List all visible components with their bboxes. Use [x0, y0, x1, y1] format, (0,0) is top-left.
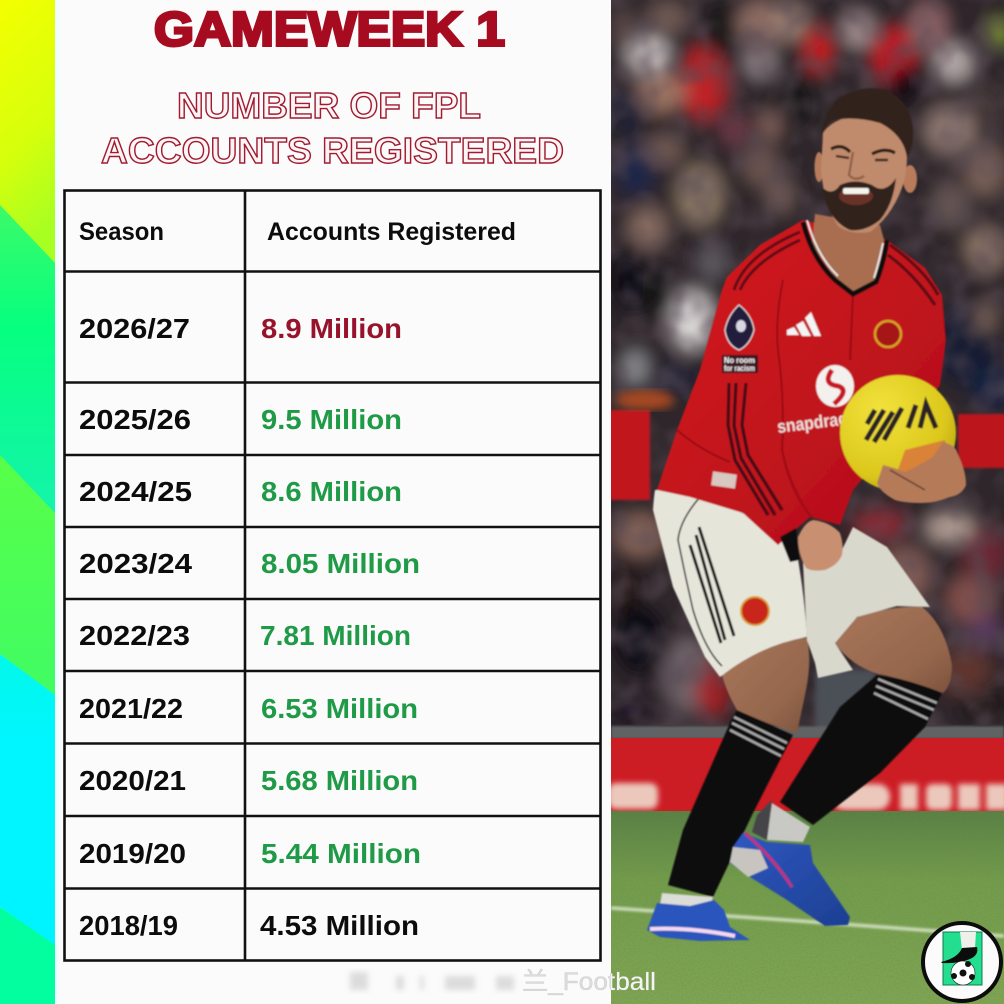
blurred board lettering: [608, 783, 1004, 810]
season column: 2026/27: [79, 313, 190, 344]
accounts column: [260, 313, 421, 941]
sleeve stripes: [728, 383, 782, 515]
season column: 2021/22: [79, 693, 183, 724]
table header: Accounts Registered: [267, 218, 516, 246]
subtitle: ACCOUNTS REGISTERED: [101, 130, 564, 171]
shorts piping and stripes: [678, 497, 734, 666]
front sock stripes: [730, 717, 787, 756]
back leg sock: [780, 675, 942, 825]
accounts column: 9.5 Million: [261, 404, 402, 435]
table header: Season: [79, 218, 164, 246]
sleeve badges: for racism: [724, 364, 755, 373]
forearm and hand on ball: [877, 442, 966, 503]
shorts right panel: [803, 527, 930, 678]
accounts column: 8.6 Million: [261, 476, 402, 507]
club crest: [875, 321, 901, 347]
watermark text: 兰_Football: [522, 968, 656, 996]
season column: 2019/20: [79, 838, 186, 869]
front thigh: [720, 638, 809, 733]
beard: [822, 178, 896, 230]
grass texture: [611, 884, 1004, 1004]
front sock: [668, 710, 793, 897]
blurred crowd: [590, 0, 1004, 760]
cuff: [780, 528, 800, 562]
low white sock: [767, 803, 810, 842]
shorts left panel: [653, 488, 807, 677]
sleeve badges: [722, 305, 758, 373]
watermark text: 兰_Football: [522, 968, 656, 996]
shirt folds: [677, 280, 853, 518]
season column: 2023/24: [79, 548, 192, 579]
shorts crest: [741, 597, 769, 625]
mouth: [839, 187, 873, 205]
player figure: [647, 88, 966, 941]
shirt label: [711, 471, 737, 489]
accounts column: 7.81 Million: [260, 620, 411, 651]
season column: 2022/23: [79, 620, 190, 651]
grass pitch: [611, 811, 1004, 1004]
collar: [803, 222, 887, 294]
barrier: [611, 726, 1004, 739]
white content panel: [0, 0, 611, 1004]
title: GAMEWEEK 1: [154, 4, 505, 56]
fist: [798, 520, 843, 571]
table grid: [64, 190, 601, 961]
blurred watermark: [350, 972, 514, 990]
accounts column: 6.53 Million: [261, 693, 418, 724]
accounts column: 4.53 Million: [260, 910, 419, 941]
neck: [812, 214, 884, 293]
head: [821, 116, 907, 233]
season column: 2018/19: [79, 910, 178, 941]
sleeve badges: No room: [724, 356, 755, 365]
sponsor text: snapdragon: [776, 406, 868, 437]
subtitle: [101, 85, 564, 171]
season column: 2025/26: [79, 404, 191, 435]
back thigh: [835, 607, 952, 693]
back sock stripes: [874, 679, 937, 719]
logo badge: boot on ball: [923, 923, 1001, 1001]
nose: [849, 152, 864, 179]
accounts column: 8.05 Million: [261, 548, 420, 579]
shoulder stripes: [734, 232, 938, 305]
table header: [79, 218, 516, 246]
torso and sleeve: [657, 220, 946, 545]
ears: [814, 152, 917, 193]
season column: [79, 313, 192, 941]
red advertising board: [611, 738, 1004, 812]
pitch line: [611, 908, 1004, 936]
hair: [822, 88, 913, 158]
planted boot: [660, 893, 713, 907]
photo: player with ball in stadium: [590, 0, 1004, 1004]
ball: [840, 375, 956, 491]
gradient side strip: [0, 0, 59, 1004]
accounts column: 5.68 Million: [261, 765, 418, 796]
badge: premier league: [725, 305, 754, 350]
raised boot: [730, 833, 850, 926]
sponsor logo: [816, 365, 854, 407]
eyes and brows: [831, 147, 895, 154]
season column: 2020/21: [79, 765, 186, 796]
adidas logo: [787, 312, 821, 336]
subtitle: NUMBER OF FPL: [177, 85, 481, 126]
season column: 2024/25: [79, 476, 192, 507]
accounts column: 8.9 Million: [261, 313, 402, 344]
data table: [64, 190, 601, 961]
accounts column: 5.44 Million: [261, 838, 421, 869]
